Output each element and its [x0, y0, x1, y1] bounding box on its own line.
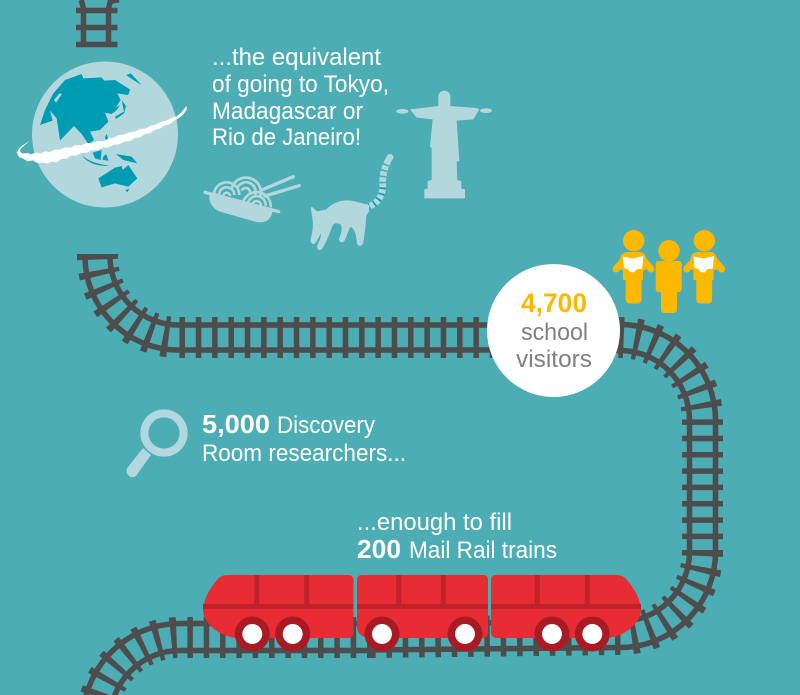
icon: three children reading: [616, 230, 722, 313]
icon: magnifying glass: [126, 413, 184, 477]
train car: rear: [491, 575, 641, 638]
callout: school visitors circle: visitors: [516, 346, 592, 373]
text: enough to fill 200 Mail Rail trains: Mail Rail trains: [409, 537, 557, 564]
icon: ring-tailed lemur: [312, 157, 390, 249]
railway track: right side curve and vertical: [600, 324, 716, 556]
text: 5,000 Discovery Room researchers: 5,000: [202, 409, 270, 439]
text: the equivalent of going to Tokyo, Madagascar or Rio de Janeiro: [212, 44, 389, 151]
railway track: upper left curve and straight: [85, 254, 492, 350]
text: 5,000 Discovery Room researchers: [202, 409, 406, 467]
text: the equivalent of going to Tokyo, Madagascar or Rio de Janeiro: of going to Tokyo,: [212, 71, 389, 98]
text: the equivalent of going to Tokyo, Madagascar or Rio de Janeiro: Rio de Janeiro!: [212, 124, 361, 151]
icon: Christ the Redeemer statue: [396, 91, 492, 198]
icon: noodle bowl with chopsticks: [205, 177, 299, 222]
icon: globe with white orbit streak: [17, 62, 187, 208]
callout: school visitors circle: 4,700: [521, 288, 587, 318]
text: the equivalent of going to Tokyo, Madagascar or Rio de Janeiro: ...the equivalent: [212, 44, 381, 71]
text: enough to fill 200 Mail Rail trains: ...enough to fill: [357, 509, 512, 536]
railway track: bottom left curve: [83, 624, 372, 695]
illustration: red Mail Rail train: [203, 575, 641, 648]
train wheels: [239, 620, 606, 648]
train car: front: [203, 575, 354, 638]
callout: school visitors circle: school: [521, 319, 588, 346]
callout: school visitors circle: [487, 264, 620, 397]
text: the equivalent of going to Tokyo, Madagascar or Rio de Janeiro: Madagascar or: [212, 98, 363, 125]
railway track: top stub: [76, 0, 119, 47]
text: enough to fill 200 Mail Rail trains: 200: [357, 534, 401, 564]
railway track: lower right curve and bottom straight: [372, 550, 716, 650]
text: 5,000 Discovery Room researchers: Room researchers...: [202, 440, 406, 467]
text: enough to fill 200 Mail Rail trains: [357, 509, 557, 564]
train car: middle: [357, 575, 488, 638]
text: 5,000 Discovery Room researchers: Discovery: [277, 412, 375, 439]
